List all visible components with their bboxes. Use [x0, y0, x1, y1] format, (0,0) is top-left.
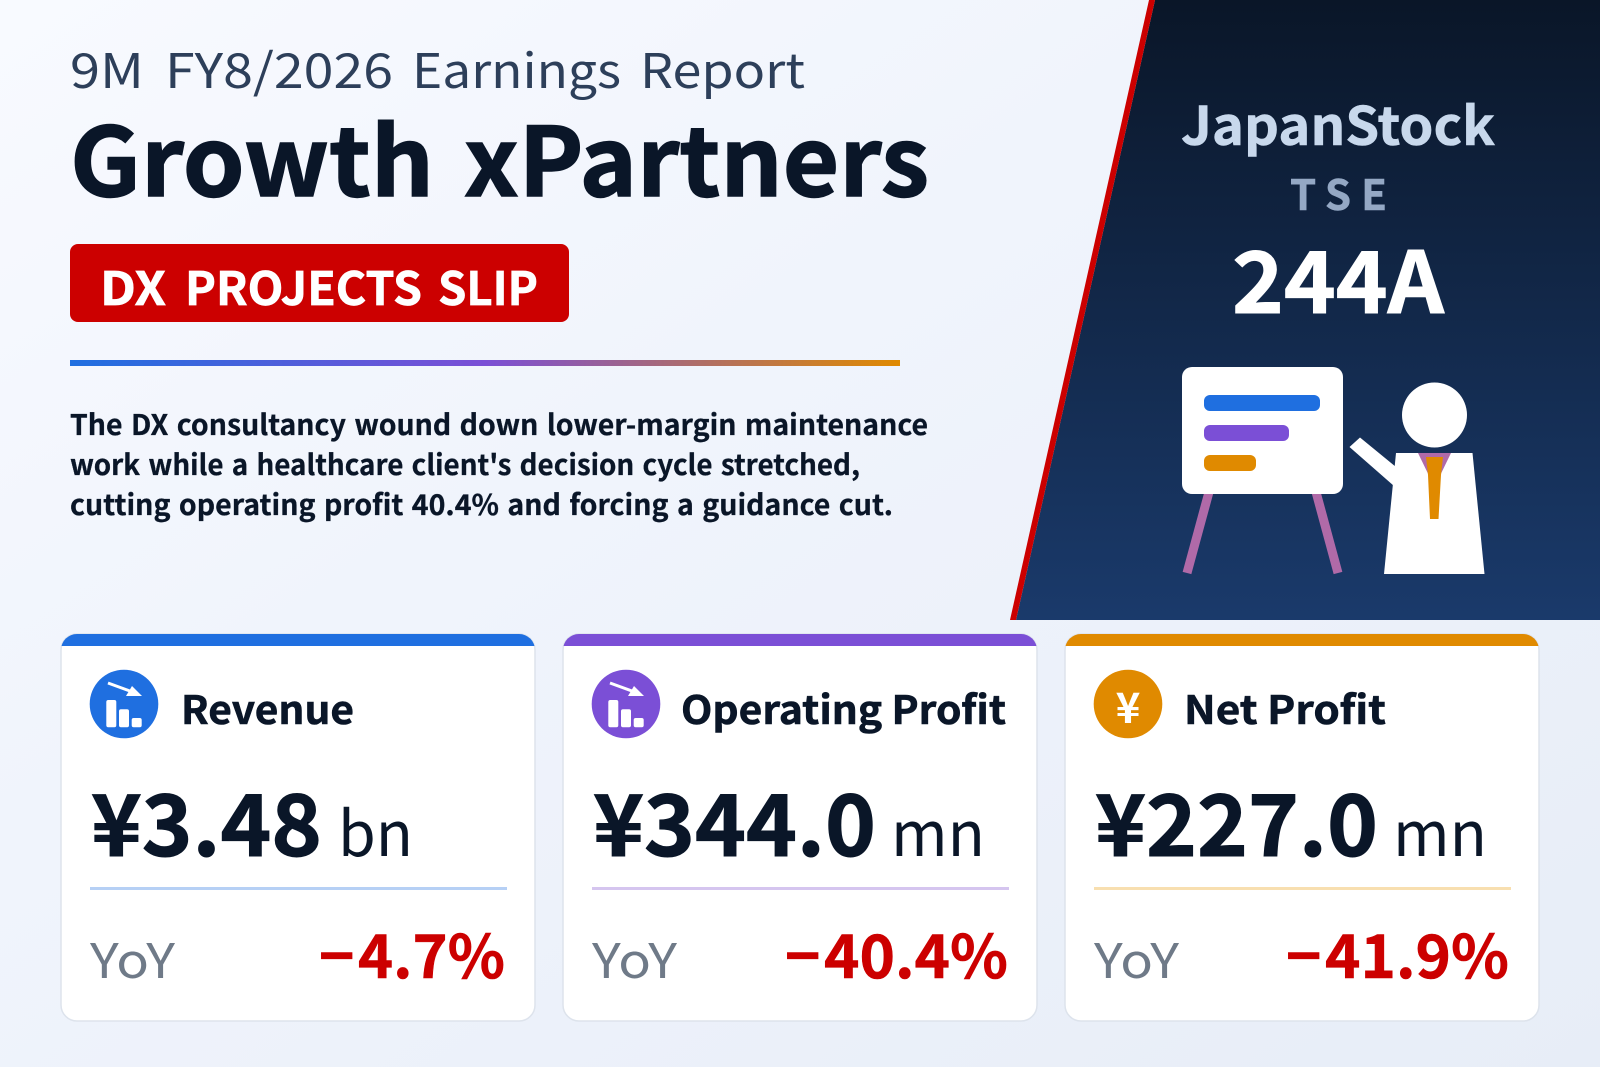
subtitle: Earnings	[412, 32, 621, 102]
panel: ticker: TSE	[1290, 162, 1387, 223]
panel: ticker: JapanStock	[1181, 85, 1495, 161]
card: revenue: bn	[338, 784, 413, 874]
card: net profit: ¥227.0	[1095, 758, 1378, 881]
card: revenue: Revenue	[181, 680, 354, 736]
card: operating profit: YoY	[591, 922, 678, 992]
icon: falling bars	[90, 670, 158, 738]
card: net profit: YoY	[1093, 922, 1180, 992]
card: revenue: YoY	[89, 922, 176, 992]
change: revenue: −	[319, 909, 354, 996]
panel: ticker	[1010, 0, 1600, 620]
card: operating profit: mn	[891, 784, 985, 874]
icon: presenter at board	[1182, 367, 1484, 574]
change: net profit: −	[1286, 909, 1321, 996]
change: revenue: 4.7%	[358, 909, 505, 996]
icon: falling bars	[592, 670, 660, 738]
change: operating profit: −	[785, 909, 820, 996]
gradient divider	[70, 360, 900, 366]
subtitle: 9M	[70, 32, 144, 102]
summary paragraph	[70, 403, 928, 524]
badge: DX projects slip	[70, 244, 569, 322]
card: net profit	[1064, 634, 1540, 1021]
subtitle: Report	[640, 32, 805, 102]
card: operating profit: ¥344.0	[593, 758, 876, 881]
change: net profit: 41.9%	[1325, 909, 1509, 996]
card: operating profit	[562, 634, 1038, 1021]
panel: ticker: 244A	[1232, 215, 1445, 338]
card: revenue: ¥3.48	[91, 758, 322, 881]
badge: DX projects slip: SLIP	[438, 253, 538, 319]
summary paragraph: The DX consultancy wound down lower-margin maintenance	[70, 403, 928, 444]
card: revenue	[60, 634, 536, 1021]
card: net profit: Net Profit	[1184, 680, 1386, 736]
title: xPartners	[464, 87, 929, 224]
title: Growth	[70, 87, 434, 224]
summary paragraph: cutting operating profit 40.4% and forcing a guidance cut.	[70, 483, 893, 524]
title	[70, 87, 929, 224]
icon: yen coin	[1094, 670, 1162, 738]
badge: DX projects slip: PROJECTS	[185, 253, 422, 319]
badge: DX projects slip: DX	[100, 253, 166, 319]
card: net profit: mn	[1393, 784, 1487, 874]
summary paragraph: work while a healthcare client's decision cycle stretched,	[70, 443, 860, 484]
card: operating profit: Operating Profit	[681, 680, 1006, 736]
change: operating profit: 40.4%	[824, 909, 1008, 996]
icon: yen coin: ¥	[1116, 675, 1141, 736]
subtitle	[70, 32, 805, 102]
subtitle: FY8/2026	[165, 32, 393, 102]
